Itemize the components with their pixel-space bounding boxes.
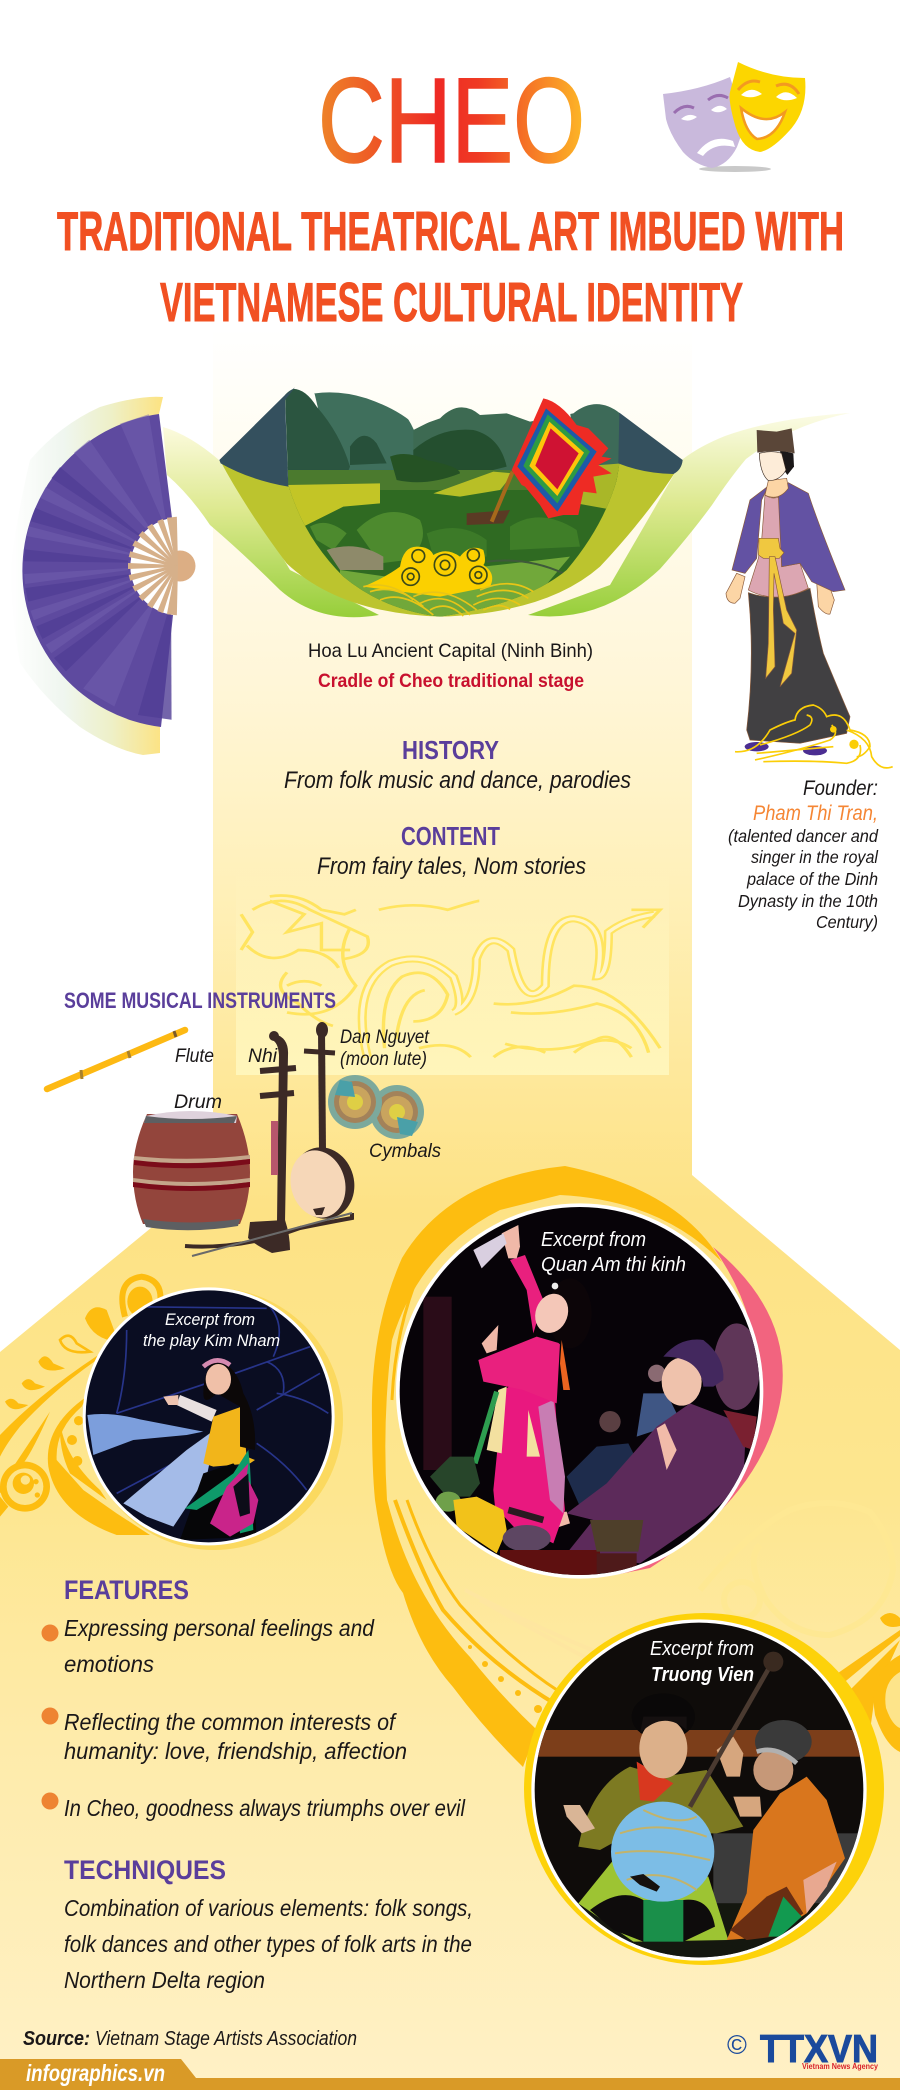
footer: infographics.vn: infographics.vn <box>26 2060 165 2086</box>
section: techniques: TECHNIQUES <box>64 1855 226 1885</box>
photo: Kim Nham <box>82 1287 335 1546</box>
section: features: Expressing personal feelings and <box>64 1615 375 1641</box>
ribbon: right green <box>528 413 850 617</box>
section: content: From fairy tales, Nom stories <box>317 853 586 880</box>
photo: Truong Vien <box>531 1619 867 1961</box>
ornament: pale swirl right <box>700 1503 893 1635</box>
section: techniques: folk dances and other types of folk arts in the <box>64 1931 472 1957</box>
fan ribs <box>130 518 177 615</box>
label: Kim Nham: the play Kim Nham <box>143 1331 280 1350</box>
instrument labels: Drum <box>174 1091 222 1113</box>
section: features: emotions <box>64 1651 154 1677</box>
heading: subtitle <box>57 200 844 333</box>
ornament: photo shadow disc <box>85 1288 343 1550</box>
ornament: gold flourish left <box>0 1277 160 1535</box>
woman: Pham Thi Tran <box>726 428 893 768</box>
text: founder: Founder: <box>803 777 878 800</box>
fan leaf <box>22 414 173 727</box>
label: Truong Vien <box>650 1638 754 1686</box>
dragon panel <box>236 870 669 1075</box>
photo: Quan Am thi kinh <box>396 1203 764 1579</box>
section: history: From folk music and dance, parodies <box>284 767 631 794</box>
photo: karst landscape <box>280 388 627 620</box>
section: features: Reflecting the common interests of <box>64 1709 397 1735</box>
knob <box>164 550 196 582</box>
text: founder: (talented dancer and <box>728 826 879 846</box>
bullet 3 <box>42 1792 58 1810</box>
icon: drum <box>133 1111 250 1230</box>
source <box>23 2027 357 2050</box>
label: Kim Nham <box>143 1310 280 1350</box>
fan halo <box>10 397 163 755</box>
section: history: HISTORY <box>402 735 499 765</box>
text: founder: Century) <box>816 912 878 932</box>
section: features: FEATURES <box>64 1575 189 1605</box>
offerings <box>430 1457 480 1497</box>
caption: Hoa Lu: Hoa Lu Ancient Capital (Ninh Binh) <box>308 640 593 662</box>
text: founder: Pham Thi Tran, <box>753 802 878 825</box>
instrument labels: Nhi <box>248 1045 278 1067</box>
instrument labels: Flute <box>175 1045 214 1067</box>
label: Kim Nham: Excerpt from <box>165 1310 255 1329</box>
text: founder: singer in the royal <box>751 847 879 867</box>
ornament: pink crescent <box>620 1247 783 1574</box>
section: techniques <box>64 1855 473 1993</box>
section: features: In Cheo, goodness always triumphs over evil <box>64 1795 466 1821</box>
gold cloud and waves <box>363 547 533 616</box>
section: history <box>284 735 631 794</box>
ornament: gold swirl around main photo <box>372 1166 722 1767</box>
section: techniques: Northern Delta region <box>64 1967 265 1993</box>
text: founder: Dynasty in the 10th <box>738 891 878 911</box>
section: techniques: Combination of various elements: folk songs, <box>64 1895 473 1921</box>
background musicians <box>637 1393 677 1437</box>
caption: cradle: Cradle of Cheo traditional stage <box>318 671 584 692</box>
footer bar <box>0 2059 900 2090</box>
source: Source: <box>23 2027 90 2050</box>
icon: cymbals <box>328 1075 424 1139</box>
icon: theatre masks <box>663 62 805 172</box>
ribbon: left green <box>163 427 379 617</box>
bullet 2 <box>42 1708 58 1724</box>
dancer <box>493 1377 565 1543</box>
text: founder <box>728 777 879 932</box>
text: founder: palace of the Dinh <box>746 869 878 889</box>
instrument labels: Cymbals <box>369 1140 441 1162</box>
section: features: humanity: love, friendship, affection <box>64 1738 407 1764</box>
icon: flute <box>47 1030 185 1089</box>
fan with halo <box>10 397 196 755</box>
heading: musical instruments: SOME MUSICAL INSTRUMENTS <box>64 988 336 1013</box>
section: content: CONTENT <box>401 821 500 851</box>
logo: TTXVN: © <box>727 2030 747 2060</box>
source: Vietnam Stage Artists Association <box>95 2027 357 2050</box>
mountain caps <box>219 387 295 487</box>
bullet 1 <box>42 1624 58 1642</box>
logo: TTXVN: TTXVN <box>760 2028 878 2071</box>
label: Quan Am thi kinh <box>541 1229 686 1276</box>
landscape bowl: Hoa Lu <box>219 387 683 620</box>
instrument labels: Dan Nguyet <box>340 1026 430 1048</box>
label: Quan Am thi kinh: Excerpt from <box>541 1229 646 1251</box>
photo ring: Truong Vien <box>524 1613 884 1965</box>
ornament: gold flourish right <box>828 1613 900 1752</box>
label: Truong Vien: Excerpt from <box>650 1638 754 1660</box>
label: Quan Am thi kinh: Quan Am thi kinh <box>541 1254 686 1276</box>
instrument labels <box>174 1026 441 1162</box>
flag <box>492 398 612 522</box>
section: content <box>317 821 586 880</box>
logo: TTXVN: Vietnam News Agency <box>802 2062 878 2071</box>
section: features <box>42 1575 466 1821</box>
icon: nhi fiddle <box>248 1031 296 1253</box>
icon: moon lute <box>185 1022 362 1256</box>
instrument labels: (moon lute) <box>340 1048 427 1070</box>
title: CHEO: CHEO <box>318 52 585 188</box>
seated figure <box>567 1403 745 1563</box>
instruments illustration <box>47 1022 424 1256</box>
olive bowl <box>221 460 677 617</box>
label: Truong Vien: Truong Vien <box>651 1663 754 1686</box>
